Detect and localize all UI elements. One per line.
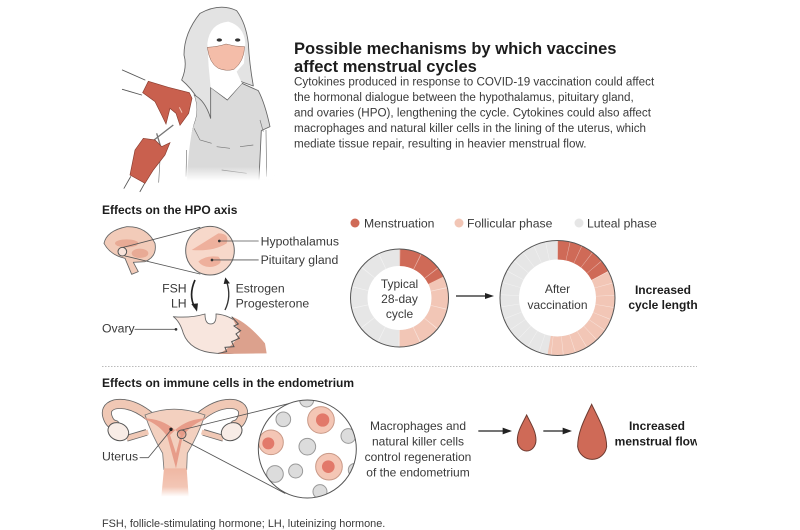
clothing and arm lines [159,120,267,183]
arrow: down to ovary [191,280,198,312]
donut label: After [545,282,570,296]
hair [182,7,253,118]
label: Hypothalamus: Hypothalamus [261,234,339,248]
donut label [527,282,588,312]
diagram: HPO axis [102,226,339,354]
text: macrophages description [365,419,471,480]
legend [350,216,657,230]
intro text block: Cytokines produced in response to COVID-19 vaccination could affect [294,76,655,88]
label: Uterus: Uterus [102,450,138,464]
arrow: to large drop [543,428,572,434]
label: Pituitary gland [211,253,338,267]
title: Possible mechanisms by which vaccines [294,39,617,58]
title: affect menstrual cycles [294,57,477,76]
donut chart: after vaccination [500,240,615,356]
donut label: 28-day [381,292,418,306]
uterus illustration [105,404,245,497]
arrow: to small drop [478,428,512,434]
intro text block [294,76,655,150]
legend: menstruation: Menstruation [364,216,434,230]
lower gloved hand [124,138,170,192]
label: Estrogen Progesterone: Estrogen [236,281,285,295]
text: macrophages description: natural killer cells [372,434,464,448]
legend: follicular phase: Follicular phase [467,216,553,230]
callout: increased cycle length: Increased [635,283,691,297]
shirt fade [180,167,275,190]
macrophages [259,407,342,480]
upper gloved hand [122,70,192,125]
arrow: up to brain [224,277,230,310]
label: FSH LH: LH [171,296,187,310]
footnote: FSH, follicle-stimulating hormone; LH, luteinizing hormone. [102,518,385,530]
intro text block: and ovaries (HPO), lengthening the cycle. Cytokines could also affect [294,106,652,120]
magnified endometrium cells [258,393,362,499]
flow arrows and drops [478,404,607,459]
intro text block: the hormonal dialogue between the hypothalamus, pituitary gland, [294,91,634,104]
label: Estrogen Progesterone [236,281,309,310]
illustration: masked woman receiving a vaccine [122,7,275,192]
intro text block: mediate tissue repair, resulting in heavier menstrual flow. [294,138,586,150]
callout: increased cycle length [628,283,698,312]
donut label: Typical [381,277,418,291]
face mask [207,44,245,70]
neck and face [207,22,245,99]
label: Pituitary gland: Pituitary gland [261,253,338,267]
label: FSH LH: FSH [162,281,187,295]
icon: brain [104,227,155,274]
label: Uterus [102,428,173,464]
text: macrophages description: Macrophages and [370,419,466,433]
callout: increased menstrual flow: menstrual flow [615,434,700,448]
callout: increased cycle length: cycle length [628,298,698,312]
callout: increased menstrual flow [615,421,697,446]
legend: luteal phase: Luteal phase [587,216,657,230]
magnifier lines [182,403,290,493]
magnifier lines [123,227,200,274]
heading: HPO axis: Effects on the HPO axis [102,203,238,217]
label: FSH LH [162,281,187,310]
label: Hypothalamus [218,234,339,248]
syringe [154,125,173,147]
donut label [381,277,418,321]
donut label: cycle [386,307,413,321]
natural killer cells [266,400,355,497]
text: macrophages description: control regeneration [365,450,471,464]
label: Estrogen Progesterone: Progesterone [236,296,309,310]
arrow: typical to after vaccination [456,293,494,299]
divider [102,366,697,368]
shirt [186,83,270,187]
donut label: vaccination [527,298,588,312]
heading: immune cells: Effects on immune cells in the endometrium [102,376,354,390]
intro text block: macrophages and natural killer cells in the lining of the uterus, which [294,122,646,135]
ovary illustration [173,314,267,354]
label: Ovary [102,322,177,336]
magnified brain circle [186,226,234,275]
title [294,39,617,76]
diagram: uterus and immune cells [102,393,362,499]
eyes [217,38,240,42]
callout: increased menstrual flow: Increased [629,419,685,433]
icon: large drop [578,404,607,459]
label: Ovary: Ovary [102,322,136,336]
patient's arm [159,95,197,187]
icon: small drop [517,415,536,451]
donut chart: typical 28-day cycle [350,249,448,347]
text: macrophages description: of the endometrium [366,466,470,480]
